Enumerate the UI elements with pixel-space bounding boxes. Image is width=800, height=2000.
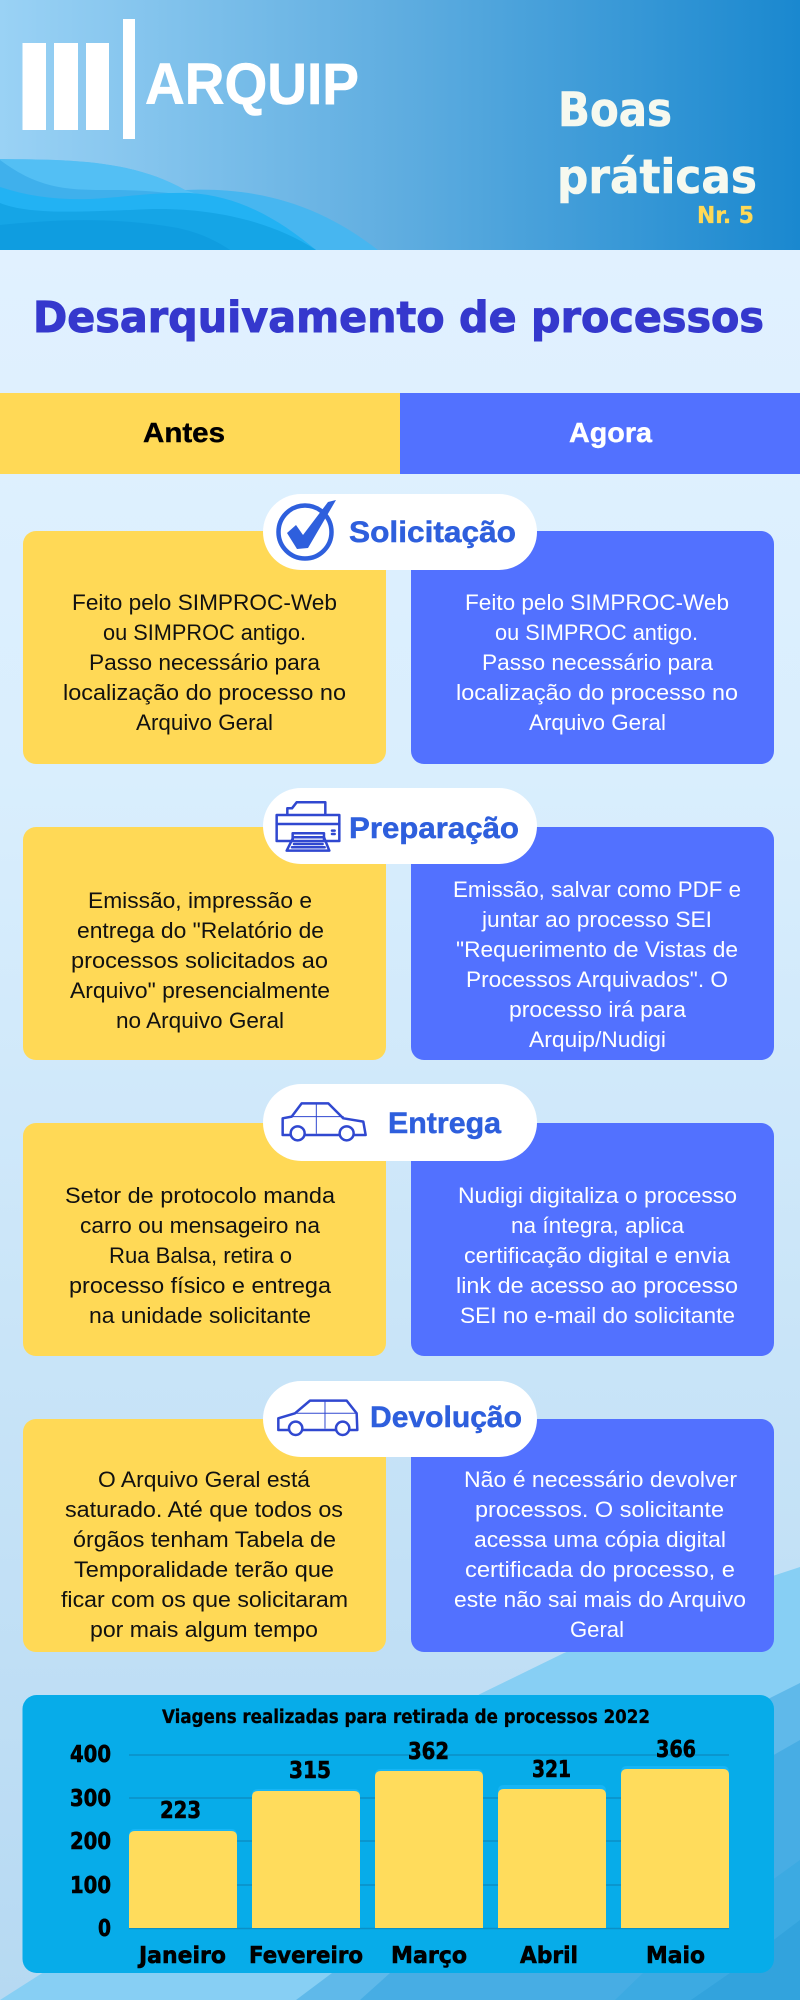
text: agora: processo irá para bbox=[509, 997, 687, 1022]
text: antes: localização do processo no bbox=[63, 680, 346, 705]
bars bbox=[129, 1766, 729, 1928]
month labels: Janeiro bbox=[137, 1943, 226, 1969]
text: antes: carro ou mensageiro na bbox=[80, 1213, 321, 1238]
text: antes bbox=[65, 1183, 336, 1328]
text: agora: juntar ao processo SEI bbox=[481, 907, 712, 932]
text: antes: na unidade solicitante bbox=[89, 1303, 311, 1328]
y axis labels: 100 bbox=[70, 1873, 111, 1899]
text: agora: Feito pelo SIMPROC-Web bbox=[465, 590, 729, 615]
value labels: 366 bbox=[656, 1737, 696, 1763]
panel: Devolução bbox=[23, 1381, 774, 1652]
bar chart panel bbox=[22, 1695, 774, 1973]
waves bbox=[0, 159, 378, 250]
column headers bbox=[0, 393, 800, 474]
text: antes: entrega do "Relatório de bbox=[77, 918, 324, 943]
series title: Boas bbox=[558, 83, 672, 138]
text: agora: Arquivo Geral bbox=[529, 710, 666, 735]
column headers: Antes bbox=[143, 417, 225, 448]
text: agora bbox=[454, 1467, 746, 1642]
pill: Preparação bbox=[263, 788, 537, 864]
panel: Solicitação bbox=[23, 494, 774, 764]
text: antes: Temporalidade terão que bbox=[74, 1557, 334, 1582]
panel: Preparação bbox=[23, 788, 774, 1060]
text: antes bbox=[61, 1467, 348, 1642]
text: antes bbox=[63, 590, 346, 735]
pill: Solicitação bbox=[263, 494, 537, 570]
text: antes: órgãos tenham Tabela de bbox=[73, 1527, 336, 1552]
header banner bbox=[0, 0, 800, 250]
panel: Entrega bbox=[23, 1084, 774, 1356]
pill: Solicitação: Solicitação bbox=[349, 516, 516, 549]
text: antes: Arquivo" presencialmente bbox=[70, 978, 330, 1003]
pill: Devolução bbox=[263, 1381, 537, 1457]
text: antes: O Arquivo Geral está bbox=[98, 1467, 311, 1492]
text: antes: Passo necessário para bbox=[89, 650, 321, 675]
text: agora: na íntegra, aplica bbox=[511, 1213, 685, 1238]
text: antes: saturado. Até que todos os bbox=[65, 1497, 343, 1522]
text: antes: Arquivo Geral bbox=[136, 710, 273, 735]
text: antes: ou SIMPROC antigo. bbox=[103, 620, 306, 645]
text: agora: Emissão, salvar como PDF e bbox=[453, 877, 741, 902]
text: agora: Processos Arquivados". O bbox=[466, 967, 728, 992]
value labels: 362 bbox=[408, 1739, 449, 1765]
text: agora: Geral bbox=[570, 1617, 624, 1642]
series title bbox=[557, 83, 757, 229]
pill: Preparação: Preparação bbox=[349, 812, 519, 845]
pill: Entrega bbox=[263, 1084, 537, 1161]
text: antes: por mais algum tempo bbox=[90, 1617, 318, 1642]
y axis labels: 200 bbox=[70, 1829, 111, 1855]
icon: car bbox=[278, 1401, 357, 1435]
column headers: Agora bbox=[569, 417, 652, 448]
icon: check mark bbox=[278, 500, 336, 558]
logo bbox=[22, 19, 359, 139]
text: agora: certificação digital e envia bbox=[464, 1243, 731, 1268]
value labels: 223 bbox=[160, 1798, 201, 1824]
chart title: Viagens realizadas para retirada de processos 2022 bbox=[162, 1707, 650, 1728]
text: antes: Setor de protocolo manda bbox=[65, 1183, 336, 1208]
pill: Entrega: Entrega bbox=[388, 1107, 501, 1140]
text: antes: Rua Balsa, retira o bbox=[109, 1243, 292, 1268]
text: agora: certificada do processo, e bbox=[465, 1557, 735, 1582]
series title: Nr. 5 bbox=[697, 203, 754, 229]
y axis labels: 300 bbox=[70, 1786, 111, 1812]
text: antes: Feito pelo SIMPROC-Web bbox=[72, 590, 337, 615]
text: agora: SEI no e-mail do solicitante bbox=[460, 1303, 735, 1328]
text: agora: este não sai mais do Arquivo bbox=[454, 1587, 746, 1612]
pill: Devolução: Devolução bbox=[370, 1401, 522, 1434]
text: antes: processo físico e entrega bbox=[69, 1273, 332, 1298]
icon: printer bbox=[277, 802, 339, 851]
text: antes: no Arquivo Geral bbox=[116, 1008, 284, 1033]
month labels: Março bbox=[391, 1943, 467, 1969]
text: agora bbox=[456, 1183, 738, 1328]
text: agora: acessa uma cópia digital bbox=[474, 1527, 726, 1552]
y axis labels: 0 bbox=[98, 1916, 111, 1942]
text: agora: Não é necessário devolver bbox=[464, 1467, 737, 1492]
text: agora: Passo necessário para bbox=[482, 650, 714, 675]
text: agora: processos. O solicitante bbox=[475, 1497, 724, 1522]
value labels: 315 bbox=[289, 1758, 331, 1784]
value labels bbox=[160, 1737, 696, 1824]
month labels: Abril bbox=[520, 1943, 578, 1969]
text: antes bbox=[70, 888, 330, 1033]
text: antes: ficar com os que solicitaram bbox=[61, 1587, 348, 1612]
text: agora: localização do processo no bbox=[456, 680, 738, 705]
value labels: 321 bbox=[532, 1757, 571, 1783]
title: Desarquivamento de processos bbox=[33, 293, 764, 343]
text: antes: processos solicitados ao bbox=[71, 948, 328, 973]
text: agora: Nudigi digitaliza o processo bbox=[458, 1183, 737, 1208]
month labels: Fevereiro bbox=[249, 1943, 363, 1969]
y axis labels: 400 bbox=[70, 1742, 111, 1768]
text: agora: ou SIMPROC antigo. bbox=[495, 620, 698, 645]
icon: car bbox=[283, 1103, 366, 1140]
text: agora: link de acesso ao processo bbox=[456, 1273, 738, 1298]
text: agora bbox=[453, 877, 741, 1052]
text: agora: Arquip/Nudigi bbox=[529, 1027, 666, 1052]
text: agora bbox=[456, 590, 738, 735]
series title: práticas bbox=[557, 150, 757, 205]
text: agora: "Requerimento de Vistas de bbox=[456, 937, 738, 962]
month labels bbox=[137, 1943, 705, 1969]
month labels: Maio bbox=[646, 1943, 705, 1969]
text: antes: Emissão, impressão e bbox=[88, 888, 312, 913]
logo: ARQUIP bbox=[145, 52, 359, 117]
y axis labels bbox=[70, 1742, 111, 1942]
